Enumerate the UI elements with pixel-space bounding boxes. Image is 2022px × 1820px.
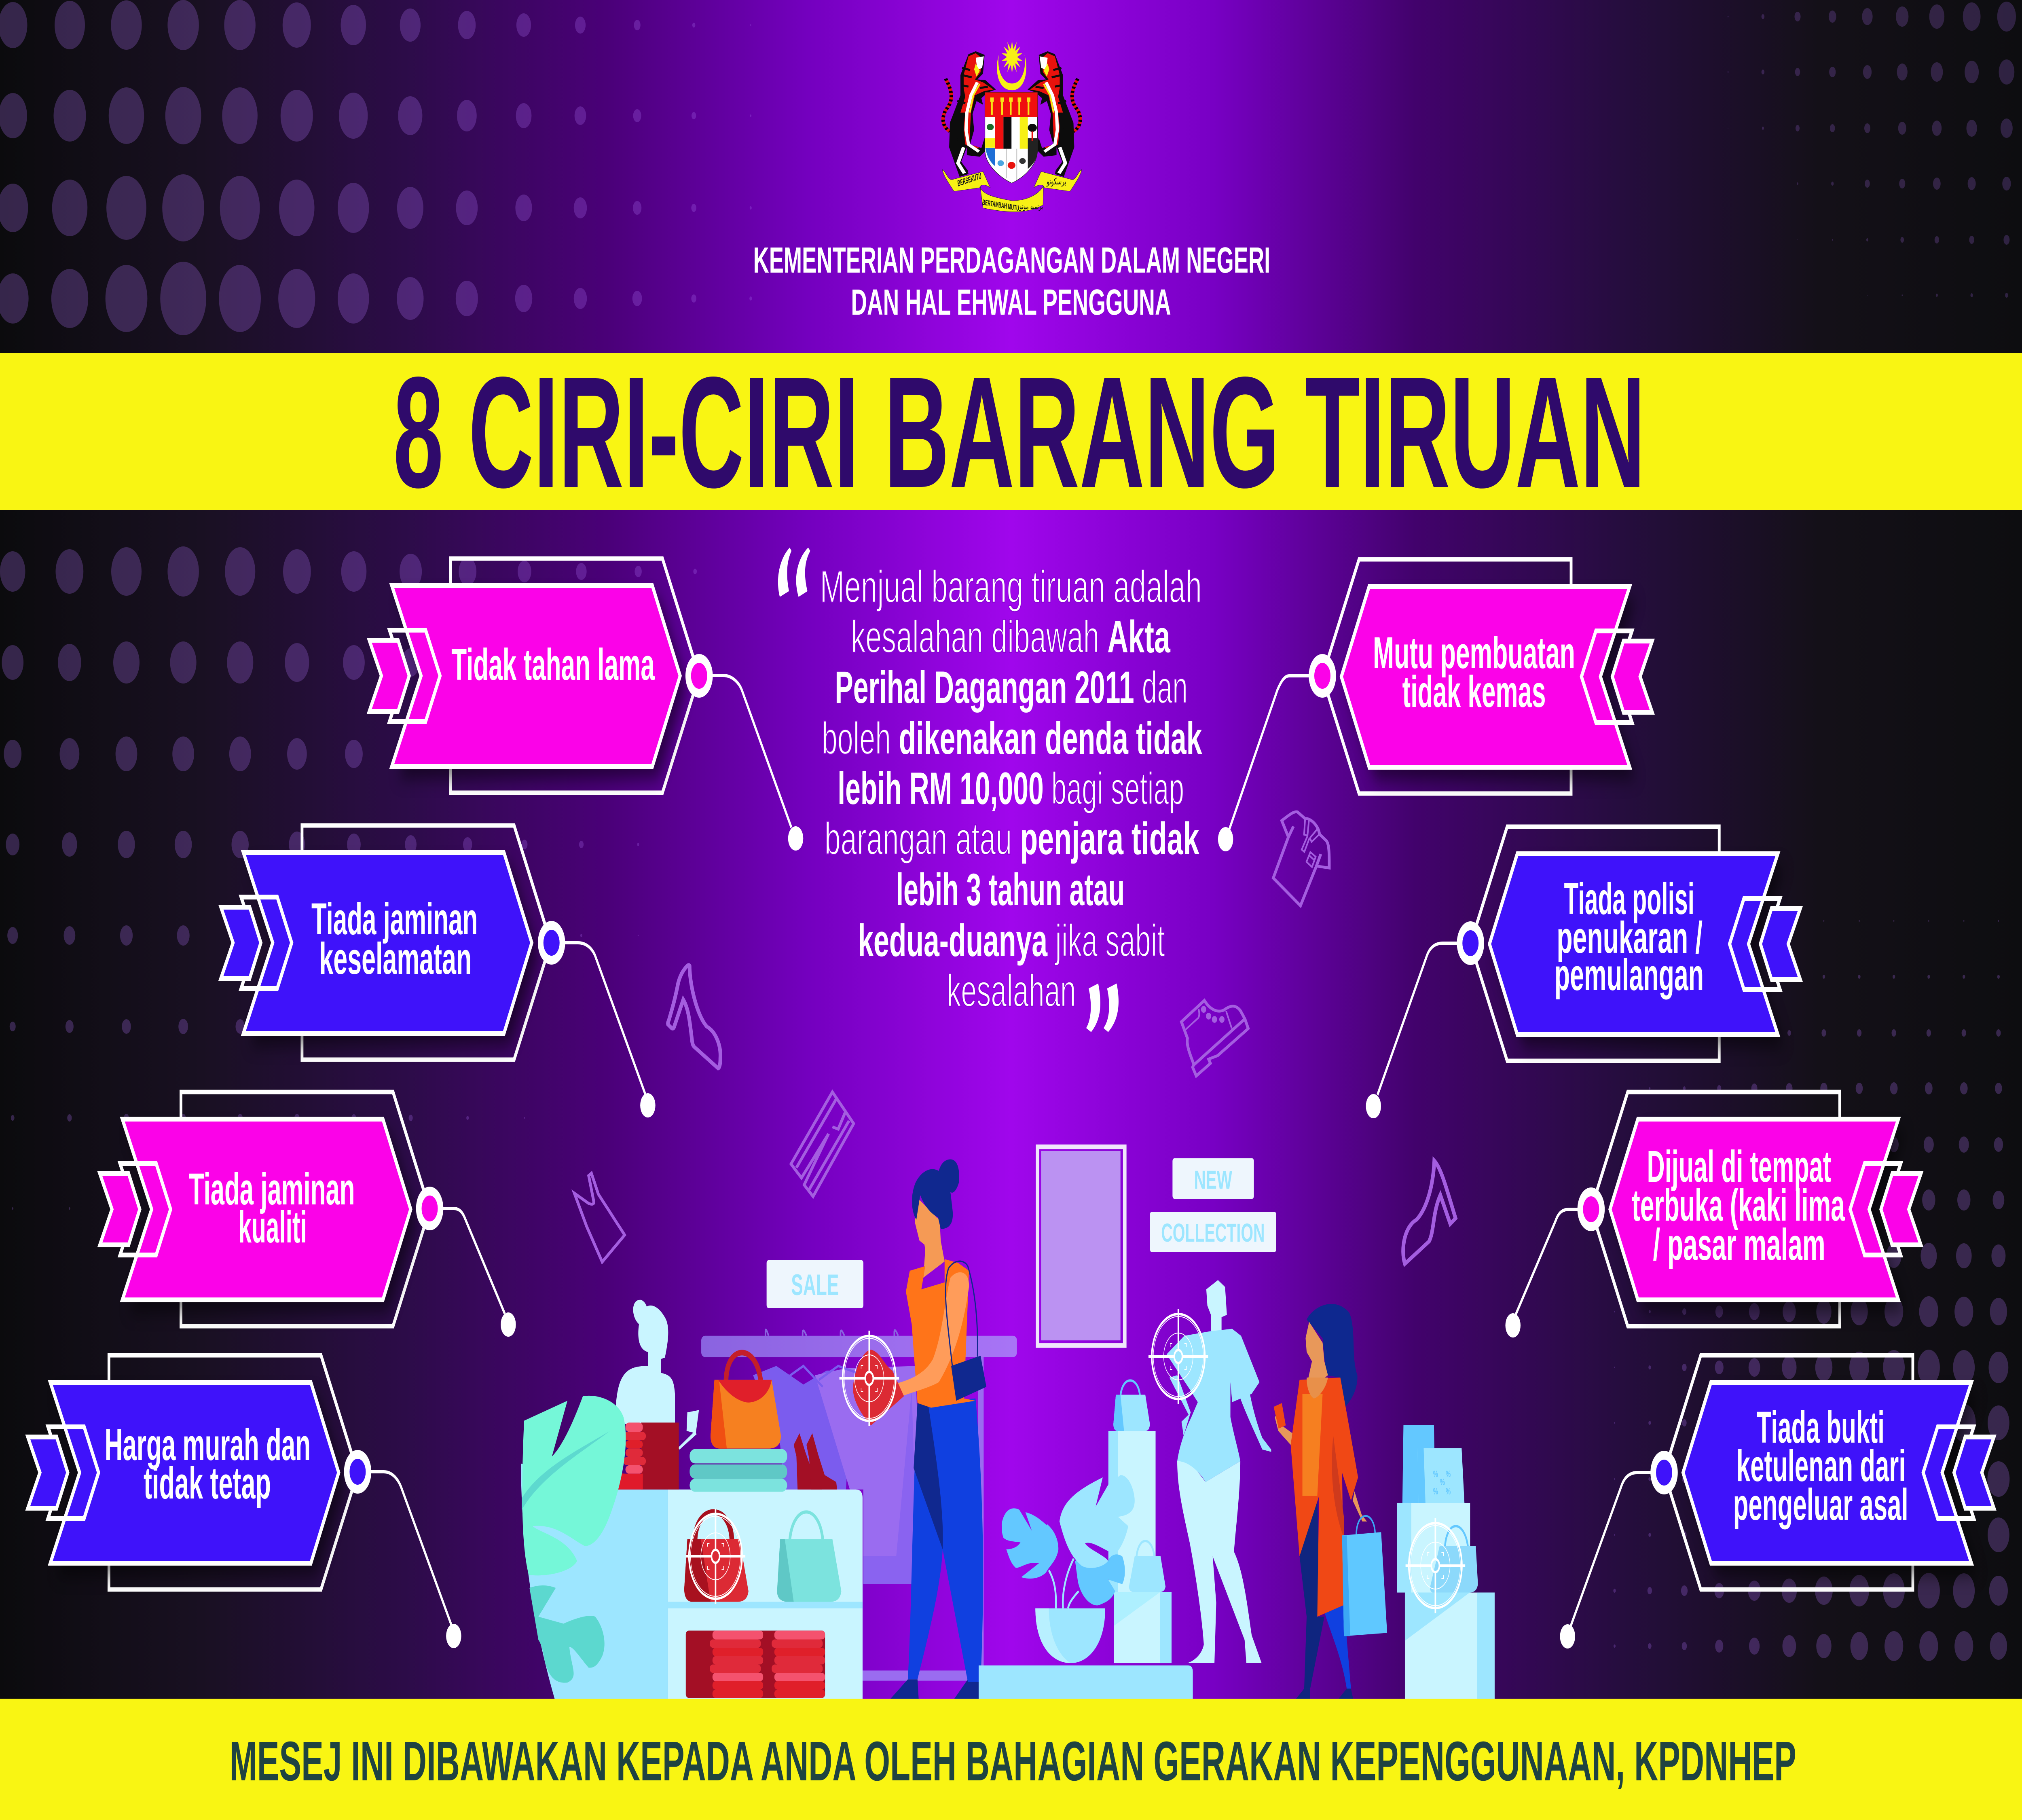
panel: Harga murah dan tidak tetap: Harga murah dan: [105, 1420, 311, 1470]
illustration: shop left half: [521, 1159, 1017, 1699]
footer banner: MESEJ INI DIBAWAKAN KEPADA ANDA OLEH BAHAGIAN GERAKAN KEPENGGUNAAN, KPDNHEP: [230, 1730, 1796, 1792]
woman in orange cardigan: [1274, 1304, 1387, 1699]
sign: COLLECTION: COLLECTION: [1161, 1219, 1265, 1247]
panel: Tiada jaminan keselamatan: Tiada jaminan: [311, 895, 478, 944]
sign: NEW: [1172, 1158, 1254, 1199]
icon: closing quotation mark: [1086, 984, 1119, 1032]
folded red clothes on counter: [578, 1422, 679, 1490]
mint monstera leaf: [522, 1396, 626, 1683]
red high heels: [794, 1433, 837, 1490]
icon: shoe outline: [1181, 1001, 1248, 1076]
icon: left high heel outline: [668, 965, 720, 1069]
window frame: [1038, 1147, 1125, 1346]
panel: Tiada bukti ketulenan dari pengeluar asal: [1560, 1355, 1994, 1649]
ministry name: DAN HAL EHWAL PENGGUNA: [851, 281, 1171, 322]
panel: Harga murah dan tidak tetap: [28, 1355, 461, 1648]
text block: legal quote: barangan atau penjara tidak: [825, 813, 1199, 864]
panel: Dijual di tempat terbuka: Dijual di tempat: [1647, 1142, 1831, 1191]
icon: Malaysian coat of arms: BERTAMBAH MUTU: [982, 198, 1019, 213]
mannequin bust: [616, 1300, 699, 1450]
text block: legal quote: kesalahan dibawah Akta: [851, 611, 1171, 662]
icon: right high heel outline: [1403, 1161, 1455, 1264]
left counter with monstera leaves: [521, 1463, 863, 1699]
ministry name: [753, 239, 1270, 322]
text block: legal quote: kesalahan: [947, 965, 1076, 1016]
panel: Tiada polisi penukaran / pemulangan: penukaran /: [1557, 913, 1703, 963]
percent marks on shopping bag: %: [1446, 1469, 1451, 1479]
folded teal clothes: [690, 1449, 787, 1492]
percent marks on shopping bag: [1433, 1469, 1451, 1496]
icon: opening quotation mark: [778, 548, 810, 597]
illustration: shop right half: [979, 1147, 1495, 1699]
panel: Tiada jaminan kualiti: Tiada jaminan: [189, 1165, 355, 1214]
panel: Tiada polisi penukaran / pemulangan: pemulangan: [1555, 950, 1704, 1000]
ministry name: KEMENTERIAN PERDAGANGAN DALAM NEGERI: [753, 239, 1270, 280]
text block: legal quote: lebih RM 10,000 bagi setiap: [838, 763, 1184, 814]
sign: SALE: [767, 1260, 863, 1308]
text block: legal quote: boleh dikenakan denda tidak: [822, 713, 1202, 764]
percent marks on shopping bag: %: [1433, 1486, 1438, 1496]
stacked red clothes on lower shelf: [686, 1631, 825, 1698]
floor platform: [979, 1666, 1193, 1699]
panel: Tidak tahan lama: [369, 559, 803, 851]
title banner: 8 CIRI-CIRI BARANG TIRUAN: [393, 344, 1646, 521]
panel: Tiada bukti ketulenan dari pengeluar asal: pengeluar asal: [1733, 1480, 1908, 1530]
target reticle: held bag: [840, 1331, 899, 1426]
panel: Tiada jaminan keselamatan: keselamatan: [319, 934, 472, 984]
panel: Dijual di tempat terbuka: terbuka (kaki lima: [1632, 1181, 1845, 1230]
sign: NEW: NEW: [1194, 1166, 1232, 1194]
percent marks on shopping bag: %: [1440, 1477, 1445, 1487]
icon: Malaysian coat of arms: برسكوتو: [1046, 177, 1066, 187]
panel: Tidak tahan lama: Tidak tahan lama: [451, 640, 655, 690]
icon: shirt outline: [1273, 812, 1329, 906]
percent marks on shopping bag: %: [1446, 1486, 1451, 1496]
text block: legal quote: kedua-duanya jika sabit: [858, 915, 1165, 966]
clothing rack: [701, 1329, 1017, 1681]
footer banner: [0, 1699, 2022, 1820]
mannequin: [1167, 1280, 1271, 1663]
icon: Malaysian coat of arms: BERSEKUTU: [957, 171, 982, 188]
panel: Harga murah dan tidak tetap: tidak tetap: [144, 1459, 271, 1508]
target reticle: mannequin: [1148, 1309, 1208, 1404]
orange handbag: [711, 1352, 781, 1449]
right pedestals and shopping bags: [1397, 1425, 1495, 1699]
icon: Malaysian coat of arms: [942, 40, 1082, 213]
text block: legal quote: Menjual barang tiruan adalah: [820, 561, 1202, 612]
icon: trousers outline: [791, 1092, 854, 1196]
halftone dots: lower right: [1580, 920, 2009, 1661]
panel: Mutu pembuatan tidak kemas: [1218, 559, 1652, 851]
panel: Mutu pembuatan tidak kemas: Mutu pembuatan: [1373, 629, 1575, 678]
panel: Tiada jaminan kualiti: kualiti: [238, 1203, 307, 1252]
panel: Tiada polisi penukaran / pemulangan: [1366, 827, 1800, 1118]
panel: Mutu pembuatan tidak kemas: tidak kemas: [1402, 667, 1546, 717]
panel: Tiada jaminan keselamatan: [221, 825, 656, 1117]
target reticle: shelf bag: [686, 1509, 745, 1604]
red handbag on shelf: [684, 1512, 749, 1602]
panel: Tiada polisi penukaran / pemulangan: Tiada polisi: [1564, 874, 1694, 924]
text block: legal quote: [820, 561, 1202, 1016]
title banner: [0, 344, 2022, 521]
sign: COLLECTION: [1150, 1212, 1276, 1252]
text block: legal quote: Perihal Dagangan 2011 dan: [835, 662, 1188, 713]
sign: SALE: SALE: [791, 1268, 839, 1302]
text block: legal quote: lebih 3 tahun atau: [896, 864, 1125, 915]
halftone dots: top right: [1728, 2, 2016, 298]
teal handbag on shelf: [777, 1512, 841, 1602]
target reticle: boxed bag: [1406, 1518, 1465, 1613]
icon: dress outline: [574, 1173, 625, 1262]
halftone dots: middle left: [0, 546, 697, 1210]
shopper woman with red bag: [853, 1159, 986, 1699]
icon: Malaysian coat of arms: برتمبه موتو: [1019, 202, 1043, 211]
pedestals with bags: [1108, 1380, 1172, 1663]
panel: Dijual di tempat terbuka: / pasar malam: [1653, 1220, 1825, 1270]
potted monstera plant: [1002, 1475, 1135, 1663]
percent marks on shopping bag: %: [1433, 1469, 1438, 1479]
halftone dots: top left: [0, 0, 752, 335]
panel: Tiada bukti ketulenan dari pengeluar asal: ketulenan dari: [1736, 1441, 1906, 1491]
panel: Tiada jaminan kualiti: [100, 1092, 516, 1337]
panel: Tiada bukti ketulenan dari pengeluar asal: Tiada bukti: [1757, 1403, 1885, 1452]
panel: Dijual di tempat terbuka: [1505, 1092, 1921, 1337]
